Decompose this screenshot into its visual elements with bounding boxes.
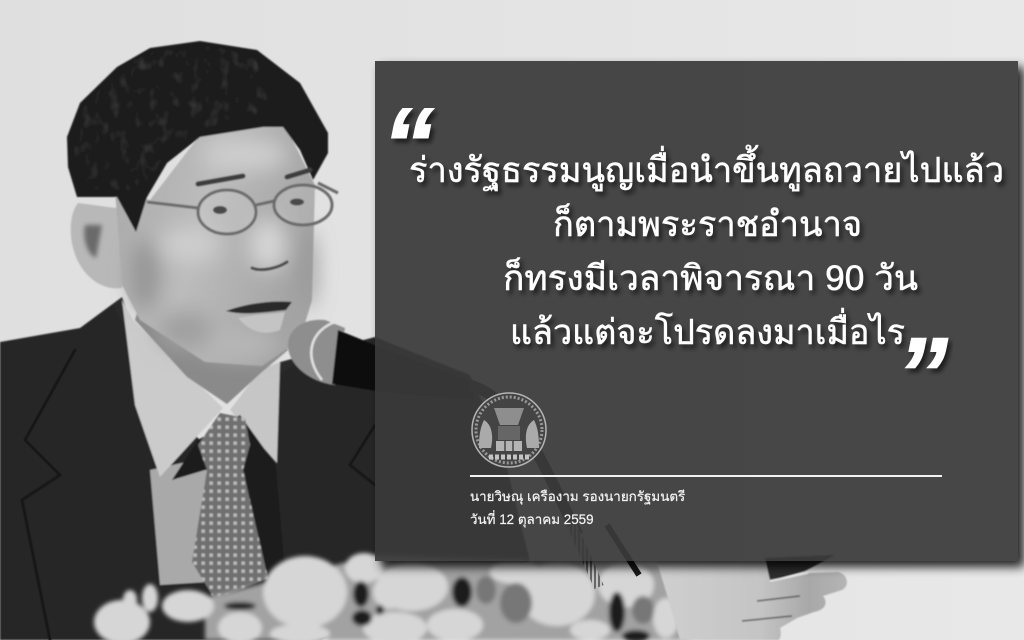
arm shadow bbox=[765, 555, 835, 581]
date: วันที่ 12 ตุลาคม 2559 bbox=[470, 510, 594, 528]
glasses bbox=[147, 183, 338, 234]
cable under panel bbox=[470, 385, 578, 535]
quote line 2: ก็ตามพระราชอำนาจ bbox=[553, 203, 862, 244]
quote text bbox=[409, 144, 1004, 352]
quote line 3: ก็ทรงมีเวลาพิจารณา 90 วัน bbox=[503, 257, 918, 298]
panel shadow bbox=[381, 67, 1024, 567]
hair texture bbox=[72, 45, 270, 190]
thin stand bbox=[607, 525, 639, 575]
nose bbox=[252, 262, 287, 270]
finger highlight bbox=[770, 573, 808, 581]
mouth bbox=[226, 301, 292, 313]
tie bbox=[192, 413, 268, 600]
icon: government seal bbox=[472, 393, 546, 467]
speaker attribution bbox=[470, 489, 685, 528]
hand silhouette bbox=[657, 561, 847, 640]
face shading bbox=[131, 139, 316, 357]
opening quote mark: “ bbox=[382, 87, 434, 203]
shirt collar right bbox=[230, 362, 280, 463]
quote line 4: แล้วแต่จะโปรดลงมาเมื่อไร bbox=[510, 308, 905, 352]
jacket lapels bbox=[22, 350, 375, 640]
eyes bbox=[213, 198, 304, 214]
panel: quote background bbox=[375, 61, 1018, 561]
photo: hand bbox=[657, 555, 847, 640]
shirt bbox=[150, 450, 240, 585]
photo: speaker portrait bbox=[0, 41, 530, 640]
face bbox=[115, 125, 315, 366]
tie shadow bbox=[172, 415, 285, 585]
speaker name: นายวิษณุ เครืองาม รองนายกรัฐมนตรี bbox=[470, 489, 685, 505]
photo: flowers bbox=[94, 553, 690, 640]
divider bbox=[470, 475, 942, 477]
quote line 1: ร่างรัฐธรรมนูญเมื่อนำขึ้นทูลถวายไปแล้ว bbox=[409, 144, 1004, 191]
neck bbox=[135, 270, 288, 404]
microphone body bbox=[332, 330, 475, 400]
closing quote mark: ” bbox=[896, 317, 948, 433]
eyebrows bbox=[198, 170, 310, 184]
jacket bbox=[0, 297, 530, 640]
hair bbox=[67, 41, 328, 232]
striped cable bbox=[572, 525, 599, 587]
shirt collar left bbox=[122, 300, 223, 477]
microphone head bbox=[288, 320, 345, 385]
ear bbox=[71, 203, 130, 288]
finger gaps bbox=[742, 596, 800, 621]
